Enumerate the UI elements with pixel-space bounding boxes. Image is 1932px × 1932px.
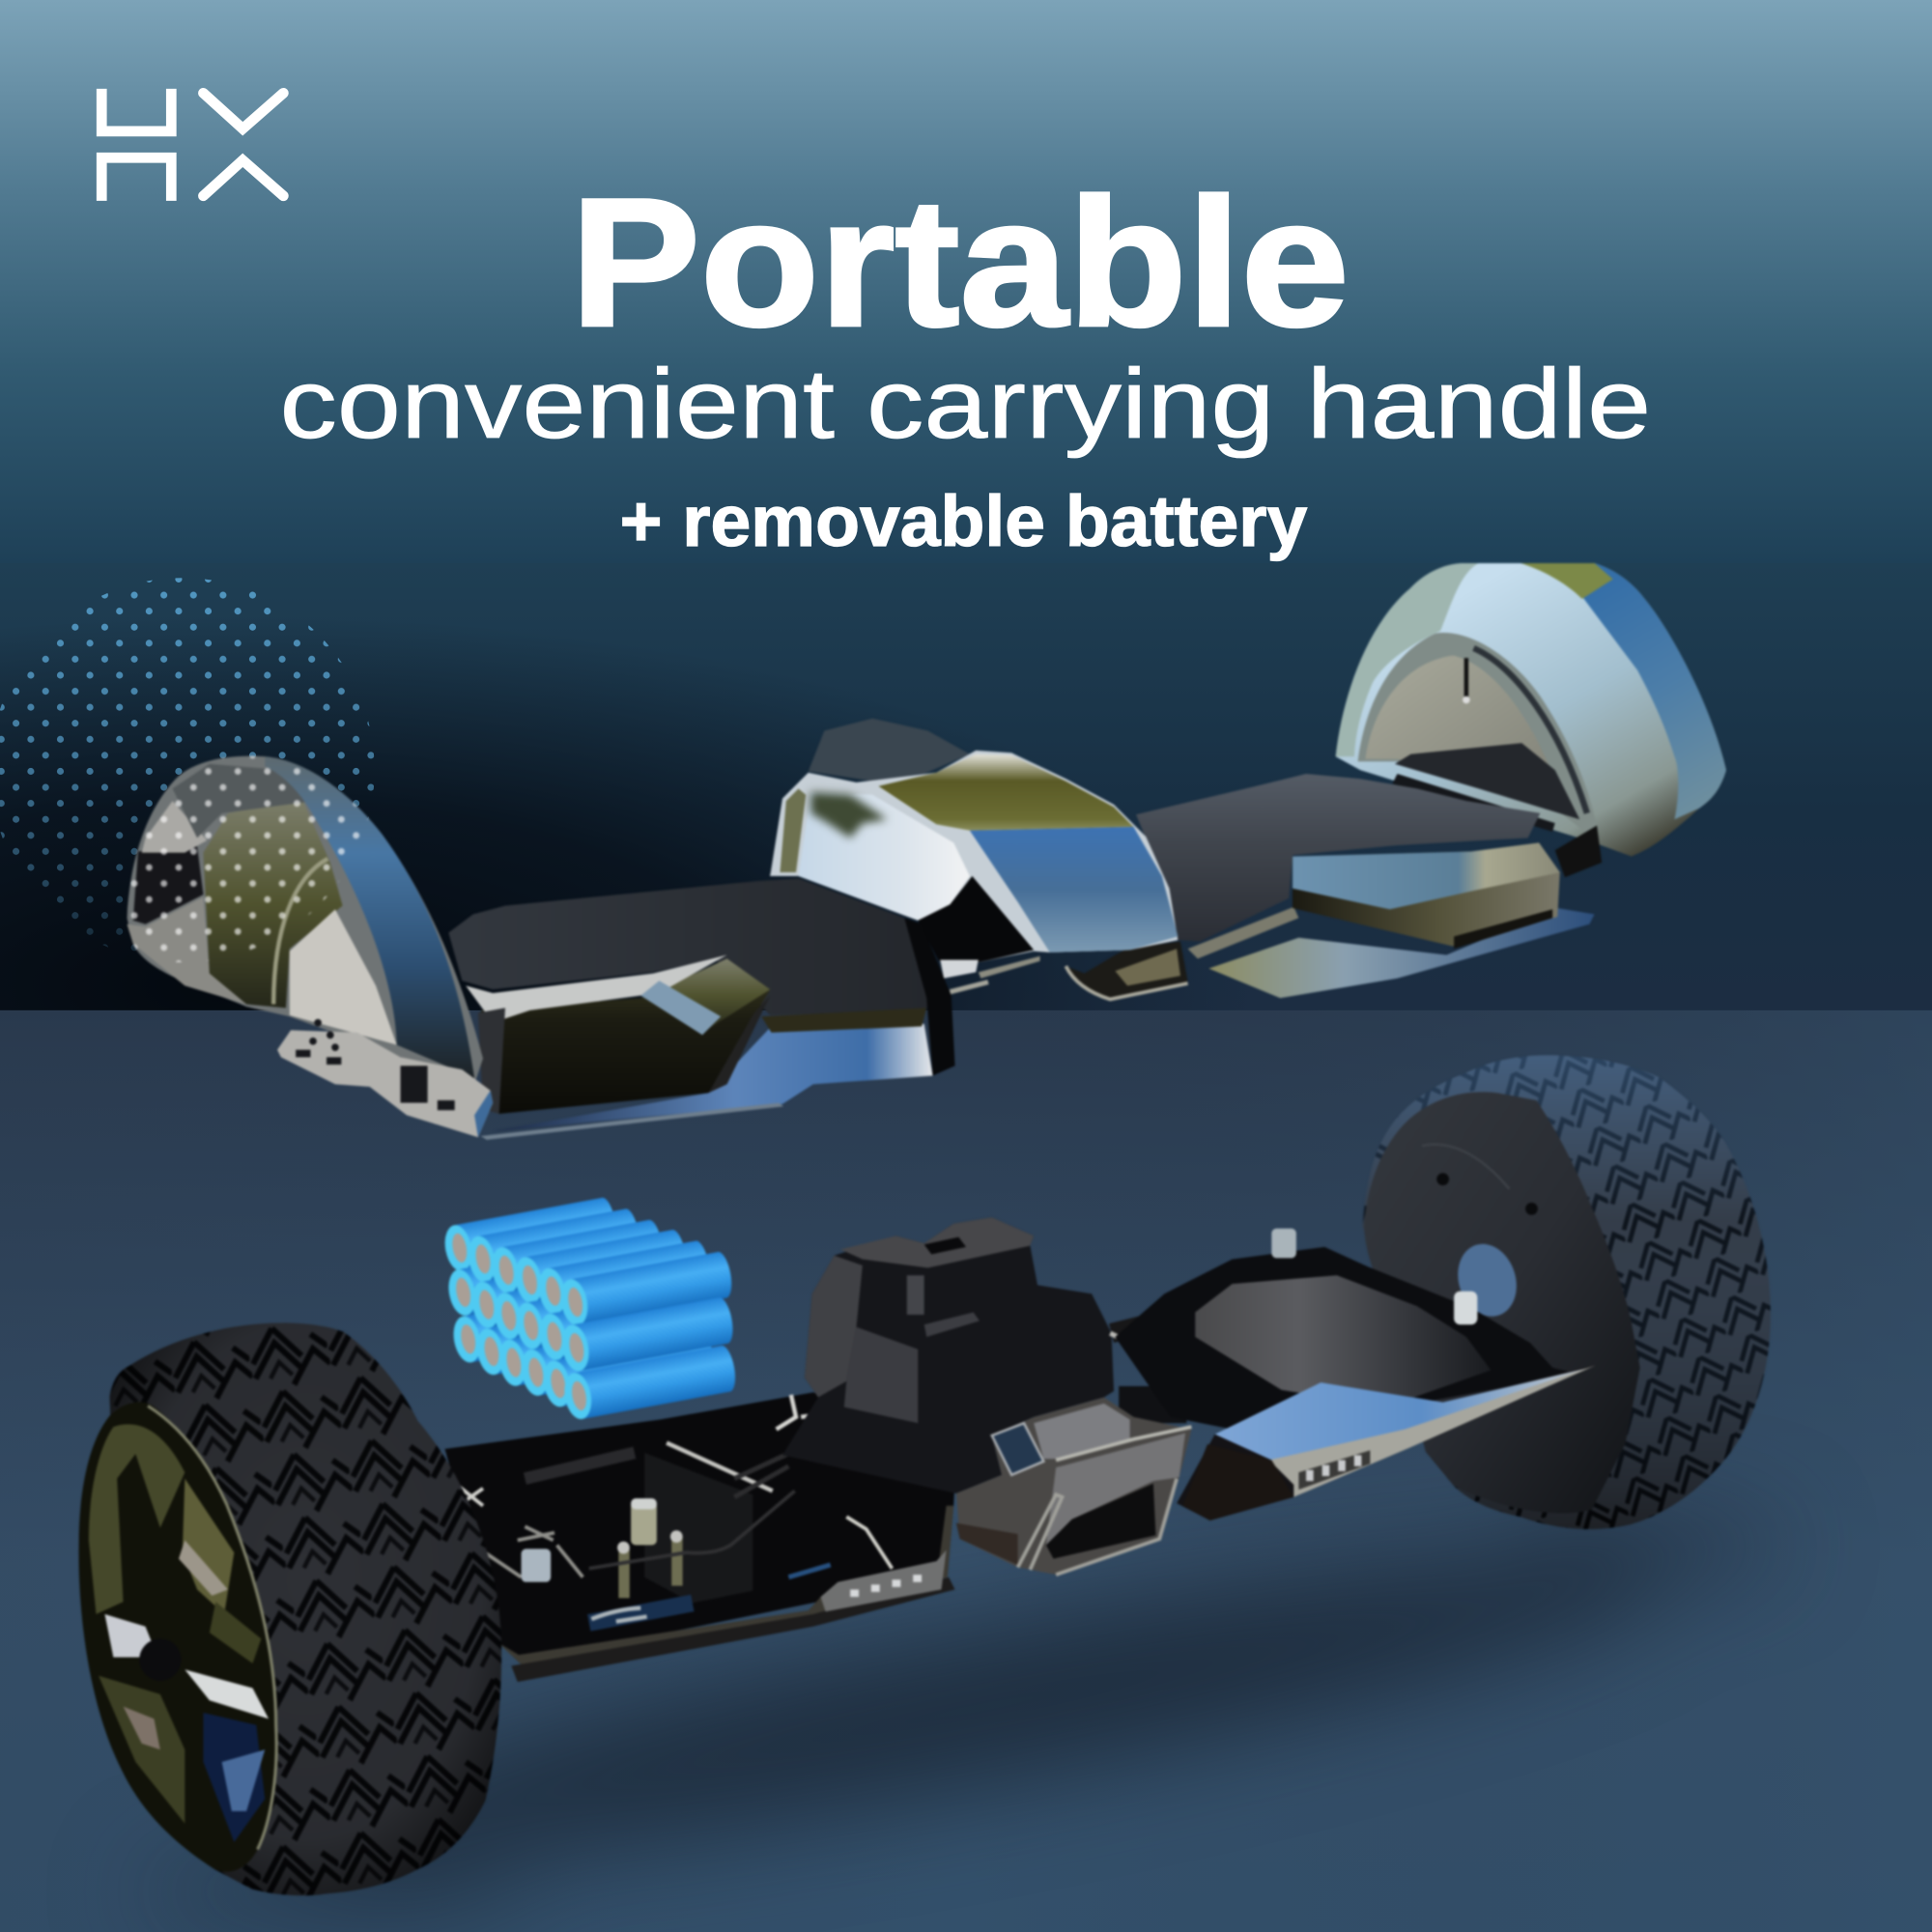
tower left panel: [805, 1256, 863, 1397]
left bracket: [277, 1019, 783, 1140]
left chassis section: [444, 1392, 956, 1682]
right fender olive top patch: [1520, 563, 1613, 599]
right fender pale rim: [1336, 563, 1479, 756]
tower cap: [840, 1217, 1034, 1267]
battery cells: [441, 1196, 738, 1421]
center arch opening: [918, 876, 1034, 962]
left wheel hub: [79, 1402, 276, 1872]
background: floor: [0, 1010, 1932, 1932]
left LED strip: [820, 1550, 947, 1611]
decorative halftone dot circle: [0, 578, 375, 962]
hoverboard upper shell: [0, 563, 1726, 1140]
hump silver left face: [799, 792, 970, 921]
right fender: [1336, 563, 1726, 877]
subtitle: convenient carrying handle: convenient carrying handle: [280, 349, 1651, 459]
right foot pad: [1136, 774, 1540, 941]
background: upper dark band: [0, 563, 1932, 1010]
title: Portable: Portable: [571, 161, 1350, 365]
right battery box: [1293, 842, 1560, 949]
right fender blue band: [1582, 563, 1726, 819]
right wheel: [1363, 1055, 1771, 1529]
right fender dark opening: [1395, 743, 1579, 819]
hump blue panel: [970, 827, 1178, 952]
subtitle: removable battery: + removable battery: [620, 481, 1307, 561]
right wheel side disc: [1364, 1092, 1640, 1514]
center handle: [809, 719, 970, 781]
left foot pad: [448, 878, 943, 1015]
chassis internals: [644, 1453, 753, 1603]
logo: [101, 89, 283, 201]
right small plate and mechanism: [1065, 907, 1595, 999]
hoverboard lower chassis: [79, 1055, 1771, 1895]
left hoverboard lower chrome: [493, 1024, 933, 1131]
center carbon bumper: [956, 1397, 1191, 1575]
left wheel: [79, 1322, 501, 1895]
hump olive top: [878, 754, 1133, 831]
hump reflected tree: [810, 792, 887, 838]
right fender inner dome: [1358, 633, 1600, 842]
right front blue plate: [1177, 1365, 1596, 1520]
right frame and plate: [1115, 1229, 1577, 1430]
left fender: [127, 756, 483, 1084]
left battery box: [466, 955, 770, 1114]
halftone dots over fender: [129, 754, 369, 964]
center hump: [770, 751, 1178, 992]
floor shadow under hoverboard: [135, 1500, 1786, 1921]
center tower: [782, 1217, 1186, 1493]
background: top gradient: [0, 0, 1932, 564]
